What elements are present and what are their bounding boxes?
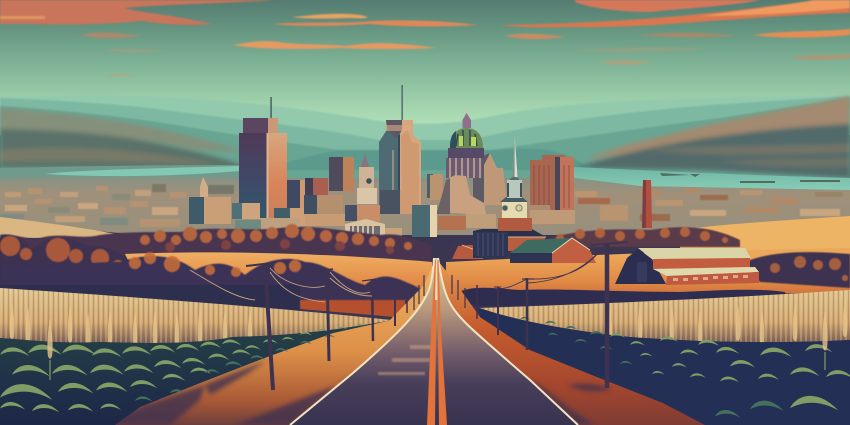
road reflections — [378, 345, 431, 375]
corn field right — [480, 290, 850, 347]
river — [0, 165, 850, 190]
temple — [345, 219, 402, 238]
chimney — [642, 180, 652, 228]
antenna tower center — [379, 85, 421, 205]
skyline right group — [430, 107, 652, 230]
skyline left group — [189, 85, 443, 238]
antenna tower left — [239, 97, 287, 218]
verge shadows — [105, 360, 612, 425]
back field left — [0, 217, 135, 238]
distant city blocks — [0, 184, 843, 227]
dark band right — [575, 124, 850, 178]
power poles right — [452, 242, 628, 388]
road edge lines — [290, 258, 578, 425]
orange field left — [125, 252, 432, 300]
distant hills — [0, 95, 850, 180]
back treeline — [0, 224, 432, 290]
big corn stalks — [47, 310, 828, 380]
corn field left — [0, 288, 392, 349]
crop leaves right — [478, 308, 850, 425]
back field right — [680, 216, 850, 250]
red office tower — [530, 155, 574, 211]
block towers — [189, 177, 437, 237]
foreground treeline right — [450, 288, 785, 306]
capitol back building — [473, 153, 507, 205]
brown band right — [585, 96, 850, 160]
roadside verge left — [110, 262, 434, 425]
red strip left — [185, 299, 405, 318]
left blocks — [0, 184, 234, 227]
back treeline right — [535, 227, 740, 247]
road — [290, 258, 578, 425]
roadside verge right — [439, 262, 705, 425]
orange field right — [446, 248, 850, 300]
power poles left — [190, 263, 424, 390]
back treeline far right — [745, 252, 850, 288]
dark band left — [0, 129, 250, 168]
clock tower left — [357, 153, 377, 204]
clouds — [0, 0, 850, 76]
small red barn — [448, 245, 483, 259]
city ground — [0, 177, 850, 235]
center lines — [427, 260, 436, 425]
capitol front building — [430, 175, 575, 230]
crop leaves left — [0, 320, 392, 425]
church with steeple — [473, 135, 546, 258]
capitol dome — [446, 107, 484, 178]
right blocks — [575, 188, 843, 221]
large barn — [615, 248, 759, 285]
foreground treeline left — [0, 252, 428, 320]
sky — [0, 0, 850, 135]
brown band left — [0, 108, 245, 152]
green roof hall — [510, 238, 596, 263]
mid buildings — [287, 157, 443, 208]
